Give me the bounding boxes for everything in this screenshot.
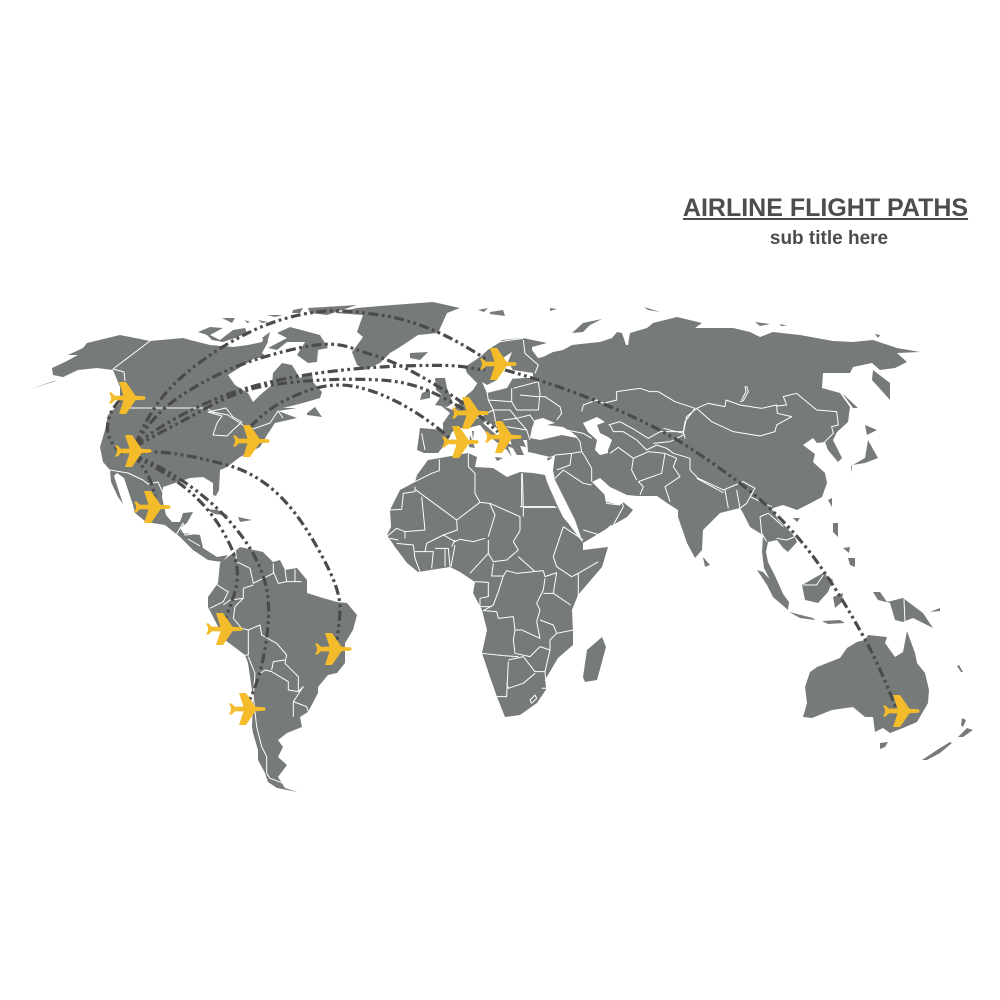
land: Arctic Russian islands and Mediterranean islands: [469, 307, 787, 461]
path: New York to Spain: [250, 385, 452, 440]
land: Iceland and British Isles: [410, 352, 453, 407]
icon: plane Germany: [452, 397, 488, 429]
land: Southeast Asian islands: [703, 498, 940, 628]
country borders: [110, 338, 905, 783]
flight paths: [108, 311, 896, 708]
land: Greenland: [335, 302, 460, 370]
path: Los Angeles to Seattle: [108, 400, 125, 455]
land: Africa: [387, 453, 608, 717]
borders: Europe: [422, 338, 540, 450]
borders: Arabian peninsula: [583, 500, 623, 535]
sea: Black Sea: [530, 418, 577, 440]
borders: South America: [210, 547, 308, 783]
icon: plane Chile: [229, 693, 266, 725]
icon: plane Brazil: [315, 633, 352, 665]
land: Eurasia: [417, 317, 920, 598]
path: Los Angeles to Peru: [133, 455, 237, 628]
airplane markers: [109, 348, 920, 727]
path: Los Angeles to Germany: [135, 379, 468, 447]
land: North and Central America: [30, 335, 322, 562]
borders: Middle East and Central Asia: [520, 388, 695, 507]
title: AIRLINE FLIGHT PATHS: [683, 194, 968, 222]
sea: Caspian Sea: [583, 417, 612, 455]
land: Tasmania and New Zealand: [880, 665, 973, 760]
icon: plane New York: [233, 425, 270, 457]
land: South America: [208, 547, 357, 792]
icon: plane Sydney: [883, 695, 920, 727]
path: Los Angeles to Sweden (south arc): [135, 365, 485, 445]
icon: plane Seattle: [109, 382, 146, 414]
path: Los Angeles to Italy: [135, 344, 498, 445]
icon: plane Italy: [485, 421, 522, 453]
borders: North America: [110, 341, 283, 546]
borders: Africa: [387, 453, 598, 703]
subtitle: sub title here: [770, 228, 888, 249]
inland seas: [530, 417, 612, 455]
land: Arctic islands and Caribbean: [198, 305, 357, 522]
land masses: [30, 302, 973, 792]
icon: plane Peru: [206, 613, 242, 645]
icon: plane Los Angeles: [115, 435, 152, 467]
borders: Central and East Asia: [653, 386, 838, 542]
land: Japan, Sakhalin and Kamchatka: [842, 334, 890, 473]
icon: plane Spain: [442, 426, 478, 458]
path: Sweden to Sydney: [505, 370, 896, 708]
icon: plane Mexico: [134, 491, 170, 523]
path: Los Angeles to Sweden (north arc): [135, 311, 487, 445]
path: Los Angeles to Chile: [133, 455, 269, 703]
land: Madagascar: [583, 637, 606, 682]
land: Australia: [803, 631, 929, 733]
icon: plane Sweden: [480, 348, 516, 380]
path: Los Angeles to Mexico: [133, 455, 155, 497]
borders: Borneo and New Guinea: [803, 575, 905, 623]
path: Los Angeles to Brazil: [135, 452, 340, 640]
